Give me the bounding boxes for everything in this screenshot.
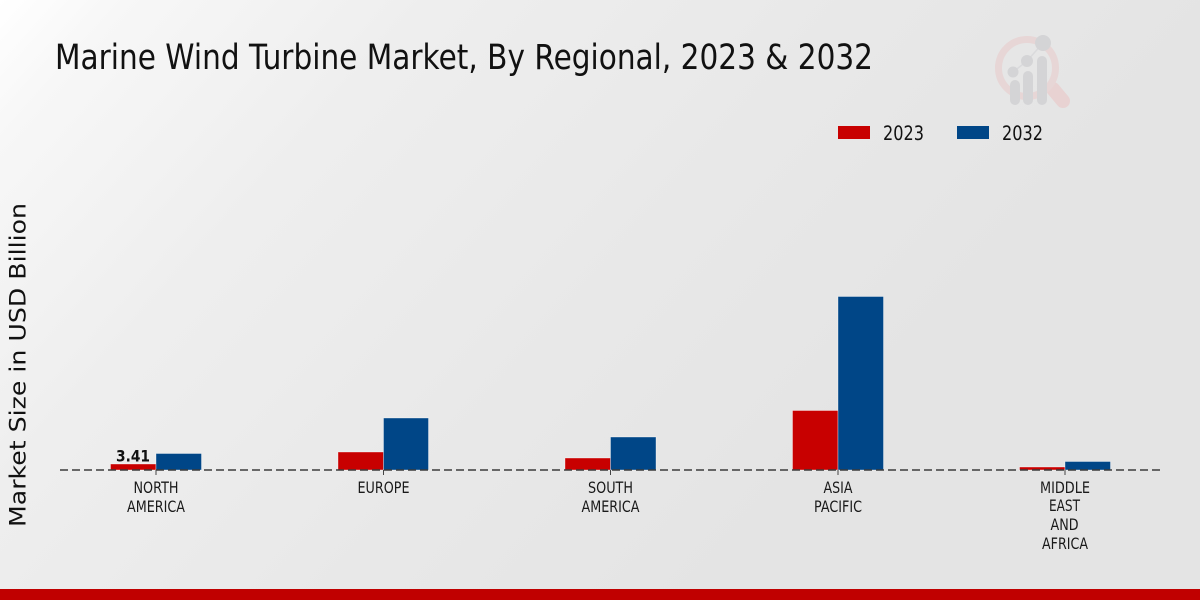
category label: Middle East and Africa: AND (1050, 515, 1078, 534)
category label: South America: SOUTH (588, 478, 633, 497)
legend: 2032 swatch (957, 126, 989, 139)
category label: South America: AMERICA (582, 497, 640, 516)
category label: South America (582, 478, 640, 516)
bars: Asia Pacific (792, 296, 884, 470)
bars: Europe (338, 418, 428, 470)
legend: 2023 label: 2023 (883, 122, 924, 145)
legend: 2032 label: 2032 (1002, 122, 1043, 145)
bar chart (60, 296, 1160, 475)
baseline (60, 469, 1160, 471)
category label: Asia Pacific: ASIA (824, 478, 853, 497)
category label: Europe: EUROPE (358, 478, 410, 497)
bars: South America (565, 437, 656, 470)
title: Marine Wind Turbine Market, By Regional, 2023 & 2032 (55, 38, 873, 78)
category label: Middle East and Africa: MIDDLE (1040, 478, 1090, 497)
category label: Middle East and Africa: AFRICA (1042, 534, 1088, 553)
icon: watermark logo (998, 35, 1063, 105)
category label: North America: AMERICA (127, 497, 185, 516)
y axis label: Market Size in USD Billion (6, 203, 32, 527)
category label: Asia Pacific: PACIFIC (814, 497, 862, 516)
data label: 3.41 (116, 446, 150, 466)
bars: Middle East and Africa (1020, 462, 1110, 470)
category label: Middle East and Africa: EAST (1049, 496, 1080, 515)
category label: North America (127, 478, 185, 516)
legend (838, 122, 1043, 145)
legend: 2023 swatch (838, 126, 870, 139)
bars: North America (110, 454, 202, 470)
bottom red band (0, 589, 1200, 600)
category label: Middle East and Africa (1040, 478, 1090, 553)
category label: North America: NORTH (134, 478, 178, 497)
category label: Asia Pacific (814, 478, 862, 516)
